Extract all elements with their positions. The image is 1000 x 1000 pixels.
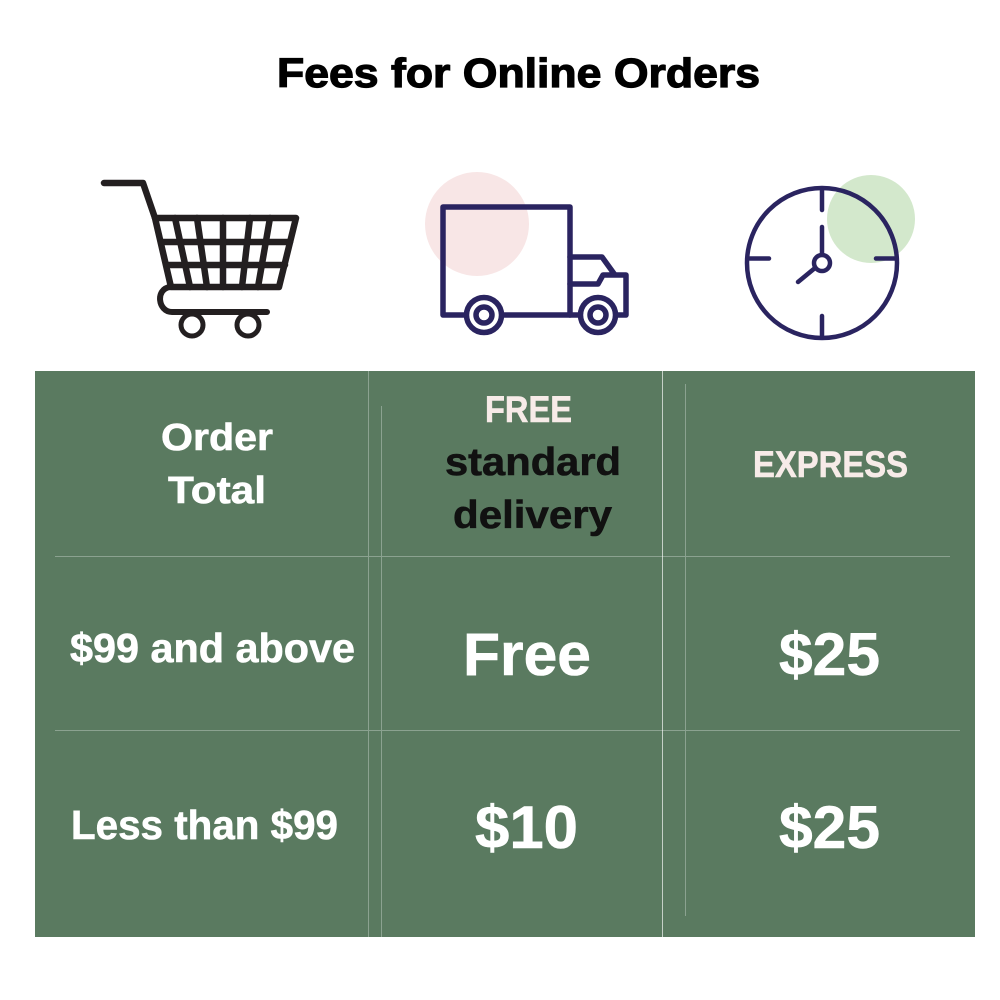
title: Fees for Online Orders [277, 50, 760, 96]
header: express: EXPRESS [753, 444, 908, 485]
icon: shopping cart [104, 183, 296, 336]
header: free standard delivery: FREE [485, 389, 572, 430]
row label: less than $99: Less than $99 [71, 802, 338, 848]
icon: clock [747, 175, 915, 338]
header: order total: Total [168, 470, 266, 512]
value: free standard, $99 and above: Free [463, 621, 591, 688]
icon: delivery truck [425, 172, 626, 332]
table background [35, 371, 975, 937]
value: free standard, less than $99: $10 [475, 794, 578, 861]
header: order total [161, 417, 273, 512]
header: free standard delivery: delivery [453, 494, 612, 537]
header: free standard delivery: standard [445, 441, 621, 484]
header: free standard delivery [445, 389, 621, 537]
header: order total: Order [161, 417, 273, 459]
fee table [35, 371, 975, 937]
row label: $99 and above: $99 and above [70, 625, 355, 671]
value: express, $99 and above: $25 [779, 621, 880, 688]
value: express, less than $99: $25 [779, 794, 880, 861]
